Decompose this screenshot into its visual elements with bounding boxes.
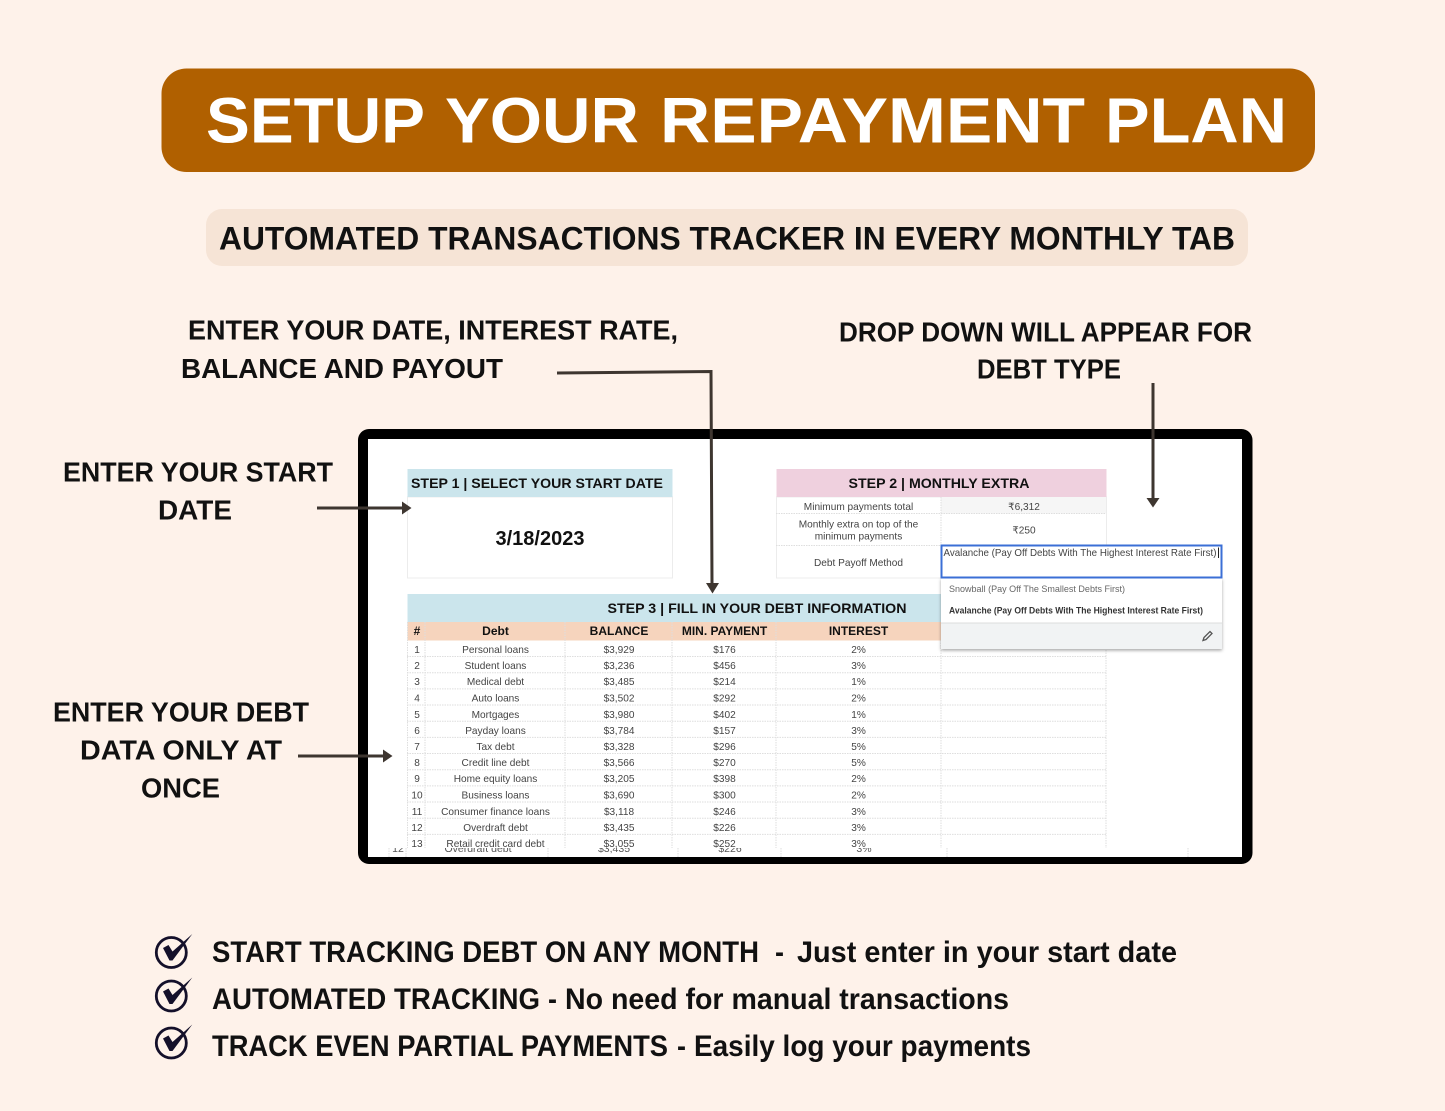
table rows: 2 bbox=[414, 661, 420, 672]
benefit 1: START TRACKING DEBT ON ANY MONTH bbox=[212, 936, 759, 969]
table rows: $246 bbox=[713, 807, 736, 818]
icon: pencil bbox=[1203, 632, 1212, 640]
title banner bbox=[162, 68, 1315, 172]
table rows: $176 bbox=[713, 645, 736, 656]
clipped row beneath the table: 12 bbox=[392, 843, 404, 855]
table rows: 5% bbox=[851, 742, 866, 753]
benefit 1: Just enter in your start date bbox=[797, 936, 1177, 969]
annotation: date, interest rate, balance and payout bbox=[181, 314, 678, 384]
step 2 panel: minimum payments bbox=[815, 532, 902, 542]
step 1 panel bbox=[408, 469, 672, 578]
step 2 panel: Monthly extra on top of the bbox=[799, 520, 919, 530]
title banner: PLAN bbox=[1105, 84, 1287, 156]
table column headers: Debt bbox=[482, 624, 509, 638]
table rows: Home equity loans bbox=[454, 774, 537, 785]
table rows: 2% bbox=[851, 694, 866, 704]
subtitle banner: AUTOMATED TRANSACTIONS TRACKER IN EVERY MONTHLY TAB bbox=[219, 220, 1235, 256]
table rows: $226 bbox=[713, 823, 736, 834]
table rows: 3% bbox=[851, 726, 866, 737]
table rows: $292 bbox=[713, 694, 736, 704]
title banner: SETUP bbox=[206, 84, 425, 156]
table rows: $402 bbox=[713, 710, 736, 721]
table rows: 3% bbox=[851, 807, 866, 818]
step 3 debt table: STEP 3 | FILL IN YOUR DEBT INFORMATION bbox=[608, 600, 906, 616]
table column headers: INTEREST bbox=[829, 624, 889, 638]
benefit 2: AUTOMATED TRACKING bbox=[212, 983, 540, 1016]
title banner: REPAYMENT bbox=[660, 84, 1085, 156]
step 2 panel: STEP 2 | MONTHLY EXTRA bbox=[848, 475, 1030, 491]
arrow: to debt table bbox=[298, 750, 392, 762]
annotation: enter your start date: ENTER YOUR START bbox=[63, 456, 333, 488]
benefit 3: - bbox=[677, 1030, 686, 1063]
clipped row beneath the table: $226 bbox=[718, 843, 742, 855]
table rows: Credit line debt bbox=[462, 758, 530, 769]
table column headers bbox=[414, 624, 889, 638]
table rows: Tax debt bbox=[476, 742, 515, 753]
table rows: $157 bbox=[713, 726, 736, 737]
table rows: $296 bbox=[713, 742, 736, 753]
table rows: 3% bbox=[851, 661, 866, 672]
spreadsheet screenshot frame bbox=[358, 429, 1252, 864]
table rows: $252 bbox=[713, 839, 736, 850]
annotation: enter your debt data only at once: DATA ONLY AT bbox=[80, 734, 282, 766]
table rows: 11 bbox=[412, 807, 423, 818]
table rows: $3,784 bbox=[604, 726, 635, 737]
table rows: $3,435 bbox=[604, 823, 635, 834]
table rows: 13 bbox=[411, 839, 423, 850]
annotation: drop down for debt type: DROP DOWN WILL APPEAR FOR bbox=[839, 316, 1252, 348]
benefit 3 bbox=[212, 1030, 1031, 1063]
dropdown menu for debt payoff method: Avalanche (Pay Off Debts With The Highest Interest Rate First) bbox=[949, 606, 1203, 616]
clipped row beneath the table: 3% bbox=[856, 843, 872, 855]
table rows: $456 bbox=[713, 661, 736, 672]
annotation: date, interest rate, balance and payout: BALANCE AND PAYOUT bbox=[181, 353, 503, 384]
table rows: Medical debt bbox=[467, 677, 524, 688]
table rows: $3,502 bbox=[604, 694, 635, 704]
annotation: enter your debt data only at once: ENTER YOUR DEBT bbox=[53, 696, 309, 728]
table rows: 10 bbox=[411, 790, 423, 802]
icon: check 1 bbox=[156, 934, 192, 968]
arrow: to dropdown bbox=[1146, 383, 1160, 508]
table rows: $3,118 bbox=[604, 807, 634, 818]
table rows: 1% bbox=[851, 710, 866, 721]
benefit 1 bbox=[212, 936, 1177, 969]
selected dropdown cell bbox=[942, 546, 1222, 578]
selected dropdown cell: Avalanche (Pay Off Debts With The Highest Interest Rate First) bbox=[944, 547, 1216, 559]
table rows: Personal loans bbox=[462, 645, 529, 656]
annotation: enter your debt data only at once: ONCE bbox=[141, 772, 220, 804]
benefit 1: - bbox=[775, 936, 784, 969]
step 3 debt table bbox=[407, 594, 1106, 850]
table rows: $3,328 bbox=[604, 742, 635, 753]
table rows: Student loans bbox=[465, 661, 526, 672]
table rows: Retail credit card debt bbox=[446, 839, 545, 850]
benefit 2: - bbox=[548, 983, 557, 1016]
benefit 2: No need for manual transactions bbox=[565, 983, 1009, 1016]
table rows: $3,236 bbox=[604, 661, 635, 672]
table rows: 8 bbox=[414, 758, 420, 769]
arrow: to start date bbox=[317, 502, 412, 514]
table column headers: BALANCE bbox=[590, 624, 648, 638]
table rows bbox=[411, 645, 866, 850]
table rows: $3,055 bbox=[604, 839, 635, 850]
benefit 2 bbox=[212, 983, 1009, 1016]
subtitle banner bbox=[206, 209, 1248, 266]
table rows: $3,690 bbox=[604, 790, 635, 802]
clipped row beneath the table: $3,435 bbox=[598, 843, 630, 855]
table rows: 2% bbox=[851, 774, 866, 785]
clipped row beneath the table: Overdraft debt bbox=[444, 843, 512, 855]
table rows: Overdraft debt bbox=[463, 823, 528, 834]
table rows: 4 bbox=[414, 694, 420, 704]
benefit 3: TRACK EVEN PARTIAL PAYMENTS bbox=[212, 1030, 668, 1063]
table rows: 5% bbox=[851, 758, 866, 769]
arrow: to step 3 table bbox=[557, 372, 719, 594]
dropdown menu for debt payoff method: Snowball (Pay Off The Smallest Debts First) bbox=[949, 584, 1125, 595]
table rows: $300 bbox=[713, 790, 736, 802]
annotation: drop down for debt type: DEBT TYPE bbox=[977, 354, 1121, 384]
annotation: date, interest rate, balance and payout: ENTER YOUR DATE, INTEREST RATE, bbox=[188, 314, 678, 346]
table rows: Mortgages bbox=[472, 710, 519, 721]
table rows: Payday loans bbox=[465, 726, 526, 737]
table rows: 5 bbox=[414, 710, 420, 721]
table rows: $214 bbox=[713, 677, 736, 688]
table rows: 9 bbox=[414, 774, 420, 785]
dropdown menu for debt payoff method bbox=[941, 578, 1222, 649]
table rows: $3,566 bbox=[604, 758, 635, 769]
icon: check 2 bbox=[156, 978, 192, 1011]
table rows: 7 bbox=[414, 742, 420, 753]
table rows: Consumer finance loans bbox=[441, 807, 550, 818]
annotation: enter your debt data only at once bbox=[53, 696, 309, 804]
step 2 panel: Debt Payoff Method bbox=[814, 558, 903, 569]
step 2 panel: Minimum payments total bbox=[804, 502, 913, 513]
annotation: enter your start date: DATE bbox=[158, 494, 232, 526]
step 1 panel: STEP 1 | SELECT YOUR START DATE bbox=[411, 475, 663, 491]
benefit 3: Easily log your payments bbox=[694, 1030, 1031, 1063]
icon: check 3 bbox=[156, 1024, 192, 1058]
annotation: enter your start date bbox=[63, 456, 333, 526]
step 2 panel bbox=[776, 469, 1106, 578]
step 2 panel: ₹6,312 bbox=[1008, 502, 1040, 513]
table rows: 3% bbox=[851, 823, 866, 834]
table rows: 1 bbox=[414, 645, 420, 656]
step 2 panel: ₹250 bbox=[1012, 526, 1036, 536]
table rows: 2% bbox=[851, 645, 866, 656]
title banner: YOUR bbox=[445, 84, 639, 156]
table rows: 1% bbox=[851, 677, 866, 688]
table column headers: # bbox=[414, 624, 421, 638]
annotation: drop down for debt type bbox=[839, 316, 1252, 384]
table rows: $398 bbox=[713, 774, 736, 785]
table rows: $270 bbox=[713, 758, 736, 769]
table rows: Auto loans bbox=[472, 694, 519, 704]
table rows: 3 bbox=[414, 677, 420, 688]
step 1 panel: 3/18/2023 bbox=[496, 528, 584, 550]
table rows: $3,485 bbox=[604, 677, 635, 688]
table rows: Business loans bbox=[462, 790, 529, 802]
table rows: $3,980 bbox=[604, 710, 635, 721]
table rows: $3,929 bbox=[604, 645, 635, 656]
table rows: $3,205 bbox=[604, 774, 635, 785]
table rows: 2% bbox=[851, 790, 866, 802]
table rows: 3% bbox=[851, 839, 866, 850]
table column headers: MIN. PAYMENT bbox=[682, 624, 768, 638]
table rows: 12 bbox=[411, 823, 423, 834]
table rows: 6 bbox=[414, 726, 420, 737]
clipped row beneath the table bbox=[388, 848, 1188, 857]
